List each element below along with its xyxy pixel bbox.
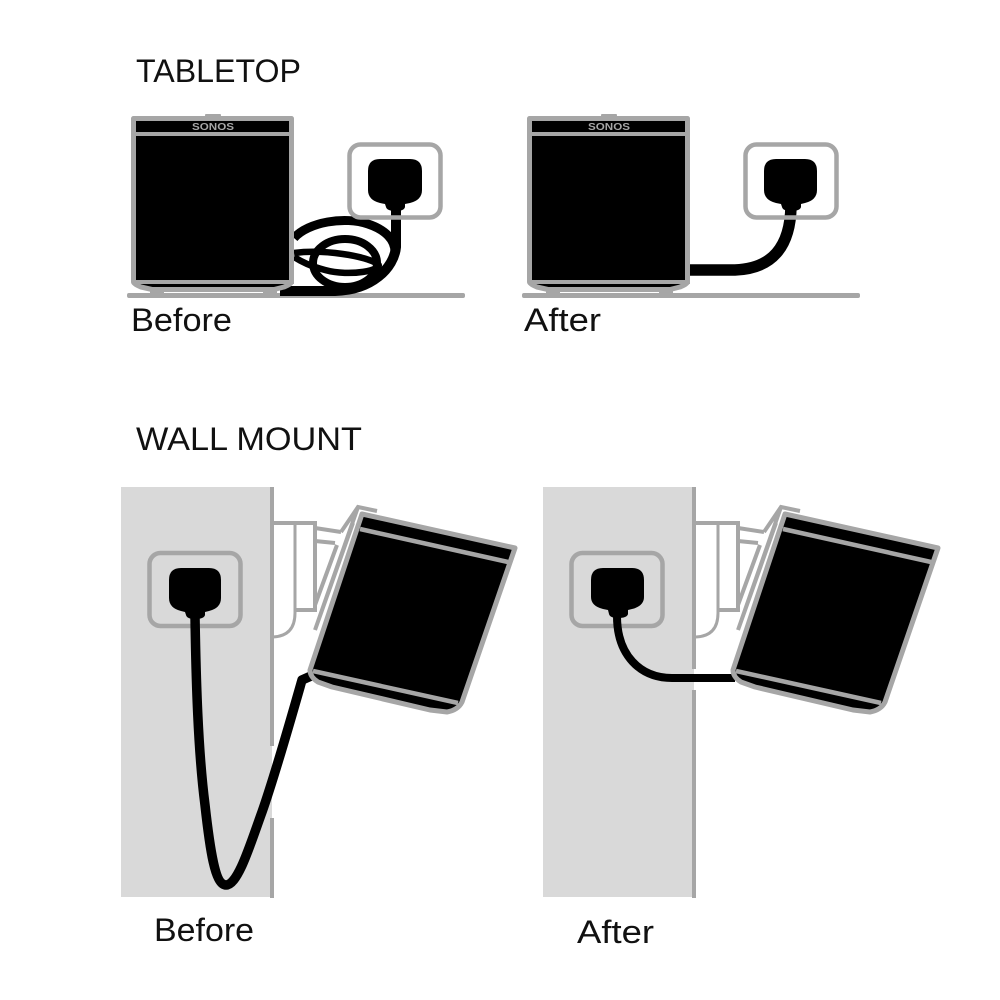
heading: tabletop: TABLETOP — [136, 53, 301, 89]
speaker — [733, 514, 938, 712]
wall socket — [746, 144, 836, 218]
bracket — [696, 507, 800, 637]
plug — [591, 568, 644, 618]
label: after: After — [577, 914, 654, 950]
tangled cable — [280, 205, 396, 291]
wall — [543, 487, 694, 897]
panel: tabletop before — [127, 114, 465, 298]
wall socket — [572, 553, 662, 626]
panel: wall mount before — [121, 487, 515, 898]
plug — [368, 159, 422, 211]
heading: wall mount: WALL MOUNT — [136, 421, 362, 457]
wall edge — [270, 487, 274, 898]
label: before: Before — [154, 912, 254, 948]
shelf — [127, 293, 465, 298]
speaker: SONOS — [588, 121, 630, 133]
plug — [169, 568, 221, 619]
wall socket — [150, 553, 240, 626]
label: after: After — [524, 302, 601, 338]
long cable — [195, 616, 311, 885]
wall socket — [350, 144, 440, 218]
shelf — [522, 293, 860, 298]
bracket — [273, 507, 377, 637]
tidy cable — [690, 206, 791, 270]
wall edge — [692, 487, 696, 898]
speaker: SONOS — [192, 121, 234, 133]
tidy cable — [617, 616, 735, 678]
speaker — [310, 514, 515, 712]
label: before: Before — [131, 302, 232, 338]
panel: tabletop after — [522, 114, 860, 298]
speaker — [132, 114, 294, 294]
panel: wall mount after — [543, 487, 938, 898]
speaker — [528, 114, 690, 294]
plug — [764, 159, 817, 211]
wall — [121, 487, 272, 897]
